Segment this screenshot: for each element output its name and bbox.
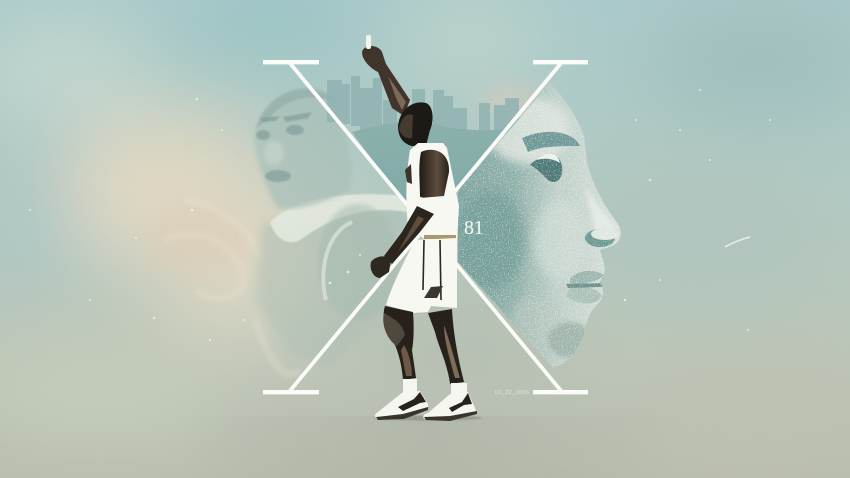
large X monogram — [263, 60, 588, 394]
shorts — [386, 238, 457, 313]
nose bridge highlight — [586, 190, 615, 230]
lips — [570, 271, 604, 284]
facial features — [256, 112, 312, 182]
stipple texture — [458, 83, 621, 368]
white streak, right — [725, 237, 750, 247]
left portrait: faded face with white towel — [255, 87, 408, 365]
eyebrow — [522, 132, 580, 152]
head — [255, 87, 352, 209]
jersey — [406, 143, 459, 240]
left knee sleeve and leg — [384, 306, 416, 380]
hair — [256, 89, 340, 128]
left arm upper — [419, 150, 449, 198]
jacket collar ring — [318, 204, 398, 320]
dust specks — [29, 89, 771, 341]
serif: top-left — [263, 60, 319, 64]
floor shadow — [374, 416, 482, 420]
right portrait: stippled profile — [456, 83, 621, 368]
serif: bottom-left — [263, 390, 319, 394]
date: 01_22_2006 — [495, 390, 529, 396]
eye — [530, 155, 562, 182]
serif: bottom-right — [533, 390, 588, 394]
serif: top-right — [533, 60, 588, 64]
floor band — [180, 416, 680, 478]
arm band — [416, 196, 438, 212]
shorts logo — [424, 286, 443, 298]
right leg — [428, 309, 464, 384]
forearm — [384, 206, 434, 264]
smoke swirl, left — [165, 200, 300, 374]
raised arm — [362, 46, 410, 116]
diagonal: top-left to bottom-right — [289, 62, 562, 392]
finger with tape — [366, 35, 371, 49]
hand — [371, 256, 391, 278]
forehead and cheek highlights — [486, 96, 570, 164]
left sock — [403, 379, 417, 392]
head — [398, 102, 433, 146]
left shoe — [375, 391, 428, 419]
right sock — [451, 383, 467, 394]
jacket body — [255, 200, 405, 365]
player figure — [362, 35, 482, 421]
shorts stripes — [423, 240, 441, 300]
stubble shadow — [456, 190, 524, 290]
right shoe — [423, 392, 477, 420]
diagonal: top-right to bottom-left — [289, 62, 562, 392]
nostril — [585, 229, 615, 247]
waistband — [424, 235, 456, 239]
city skyline — [327, 76, 519, 139]
towel over shoulder — [270, 194, 408, 242]
hillside inside the X — [352, 122, 505, 210]
jersey lettering — [405, 164, 412, 184]
number 81: 81 — [464, 217, 483, 239]
